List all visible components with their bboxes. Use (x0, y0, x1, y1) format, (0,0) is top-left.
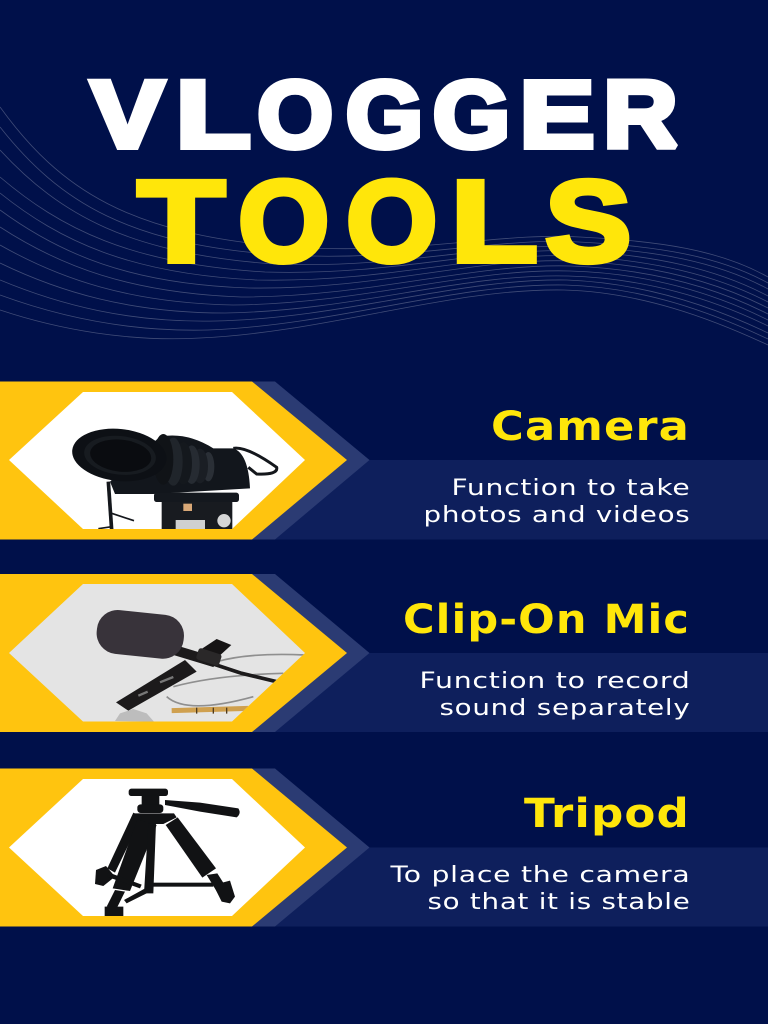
description: sound separately (440, 695, 690, 721)
description band (270, 848, 768, 926)
description: To place the camera (389, 862, 690, 888)
title line: TOOLS: O (346, 158, 437, 286)
title line: VLOGGER: V (91, 62, 164, 168)
title (91, 62, 677, 286)
title line: TOOLS: S (546, 158, 631, 286)
icon: tripod (95, 789, 240, 916)
panel: tripod (0, 768, 768, 926)
arrow chevron (252, 382, 370, 540)
title line: VLOGGER: E (520, 62, 594, 168)
title line: VLOGGER: O (258, 62, 333, 168)
description: Function to take (452, 475, 690, 501)
icon: camera (70, 424, 277, 530)
white hexagon (9, 392, 305, 529)
description: photos and videos (424, 502, 690, 528)
icon: clip-on microphone (95, 608, 305, 722)
description (424, 475, 690, 528)
title line: TOOLS: T (138, 158, 224, 286)
description band (270, 460, 768, 540)
description band (270, 653, 768, 732)
description (420, 668, 690, 721)
title line: VLOGGER: R (604, 62, 677, 168)
arrow chevron (252, 574, 370, 732)
description (389, 862, 690, 915)
white hexagon (9, 779, 305, 916)
description: so that it is stable (428, 889, 690, 915)
title line: VLOGGER: G (433, 62, 510, 168)
grey hexagon (9, 584, 305, 722)
title line: TOOLS: O (238, 158, 329, 286)
title line: VLOGGER: L (176, 62, 250, 168)
arrow chevron (252, 768, 370, 926)
title line: TOOLS: L (451, 158, 538, 286)
yellow arrow frame (0, 574, 347, 732)
yellow arrow frame (0, 768, 347, 926)
description: Function to record (420, 668, 690, 694)
title line: VLOGGER: G (346, 62, 423, 168)
heading: Tripod (524, 791, 690, 837)
yellow arrow frame (0, 382, 347, 540)
heading: Clip-On Mic (403, 597, 690, 643)
heading: Camera (491, 404, 690, 450)
panel: camera (0, 382, 768, 540)
panel: clip-on mic (0, 574, 768, 732)
